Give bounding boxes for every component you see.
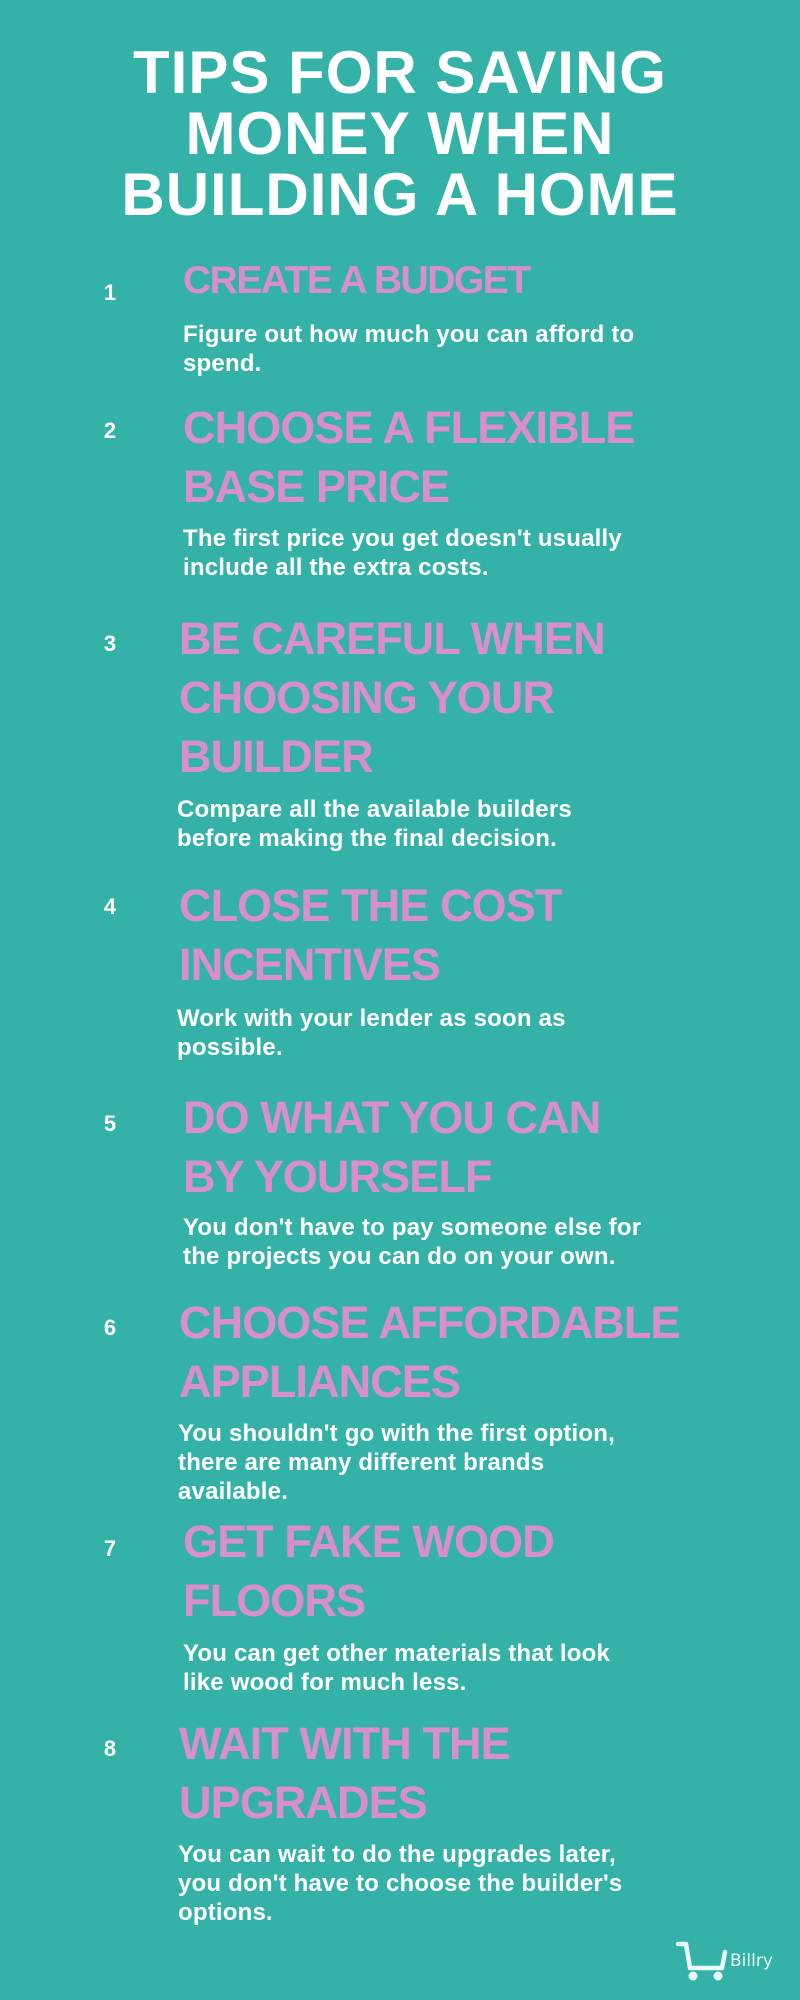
body 8: You can wait to do the upgrades later, [178, 1841, 616, 1868]
heading 3 [179, 613, 605, 782]
number 6: 6 [104, 1315, 116, 1340]
number 7: 7 [104, 1536, 116, 1561]
heading 7 [183, 1516, 554, 1626]
tip 3 [104, 613, 605, 852]
heading 8: WAIT WITH THE [179, 1718, 510, 1769]
body 2: The first price you get doesn't usually [183, 525, 622, 552]
body 3: Compare all the available builders [177, 796, 572, 823]
body 4: possible. [177, 1034, 283, 1061]
heading 2: BASE PRICE [183, 461, 449, 512]
heading 3: BE CAREFUL WHEN [179, 613, 605, 664]
body 5: You don't have to pay someone else for [183, 1214, 641, 1241]
logo: Billry cart [676, 1942, 773, 1980]
heading 4 [179, 880, 562, 990]
number 5: 5 [104, 1111, 116, 1136]
heading 4: INCENTIVES [179, 939, 440, 990]
heading 6: APPLIANCES [179, 1356, 460, 1407]
body 4: Work with your lender as soon as [177, 1005, 566, 1032]
tip 2 [104, 402, 634, 581]
heading 8 [179, 1718, 510, 1828]
title: BUILDING A HOME [121, 161, 679, 228]
body 7 [183, 1640, 610, 1696]
number 1: 1 [104, 280, 116, 305]
body 5: the projects you can do on your own. [183, 1243, 616, 1270]
body 1: spend. [183, 350, 262, 377]
heading 8: UPGRADES [179, 1777, 427, 1828]
body 1: Figure out how much you can afford to [183, 321, 634, 348]
icon: cart [676, 1942, 728, 1980]
number 8: 8 [104, 1736, 116, 1761]
number 4: 4 [104, 894, 116, 919]
title [121, 39, 679, 228]
body 2: include all the extra costs. [183, 554, 489, 581]
tip 6 [104, 1297, 680, 1505]
heading 6: CHOOSE AFFORDABLE [179, 1297, 680, 1348]
heading 2: CHOOSE A FLEXIBLE [183, 402, 634, 453]
body 3: before making the final decision. [177, 825, 557, 852]
heading 3: CHOOSING YOUR [179, 672, 554, 723]
heading 7: FLOORS [183, 1575, 365, 1626]
heading 6 [179, 1297, 680, 1407]
title: MONEY WHEN [186, 100, 614, 167]
body 8: you don't have to choose the builder's [178, 1870, 622, 1897]
body 8 [178, 1841, 622, 1926]
body 3 [177, 796, 572, 852]
body 2 [183, 525, 622, 581]
body 1 [183, 321, 634, 377]
heading 5: BY YOURSELF [183, 1151, 492, 1202]
tip 1 [104, 259, 634, 377]
body 7: You can get other materials that look [183, 1640, 610, 1667]
body 5 [183, 1214, 641, 1270]
title: TIPS FOR SAVING [133, 39, 667, 106]
heading 1: CREATE A BUDGET [183, 259, 530, 302]
body 7: like wood for much less. [183, 1669, 467, 1696]
body 6: there are many different brands [178, 1449, 544, 1476]
heading 5 [183, 1092, 600, 1202]
body 4 [177, 1005, 566, 1061]
tip 8 [104, 1718, 622, 1926]
heading 4: CLOSE THE COST [179, 880, 561, 931]
heading 5: DO WHAT YOU CAN [183, 1092, 600, 1143]
body 8: options. [178, 1899, 273, 1926]
body 6 [178, 1420, 615, 1505]
body 6: You shouldn't go with the first option, [178, 1420, 615, 1447]
heading 2 [183, 402, 634, 512]
number 3: 3 [104, 631, 116, 656]
logo text: Billry [730, 1951, 773, 1971]
tip 7 [104, 1516, 610, 1696]
body 6: available. [178, 1478, 288, 1505]
heading 7: GET FAKE WOOD [183, 1516, 554, 1567]
number 2: 2 [104, 418, 116, 443]
tip 4 [104, 880, 566, 1061]
heading 3: BUILDER [179, 731, 373, 782]
tip 5 [104, 1092, 641, 1270]
